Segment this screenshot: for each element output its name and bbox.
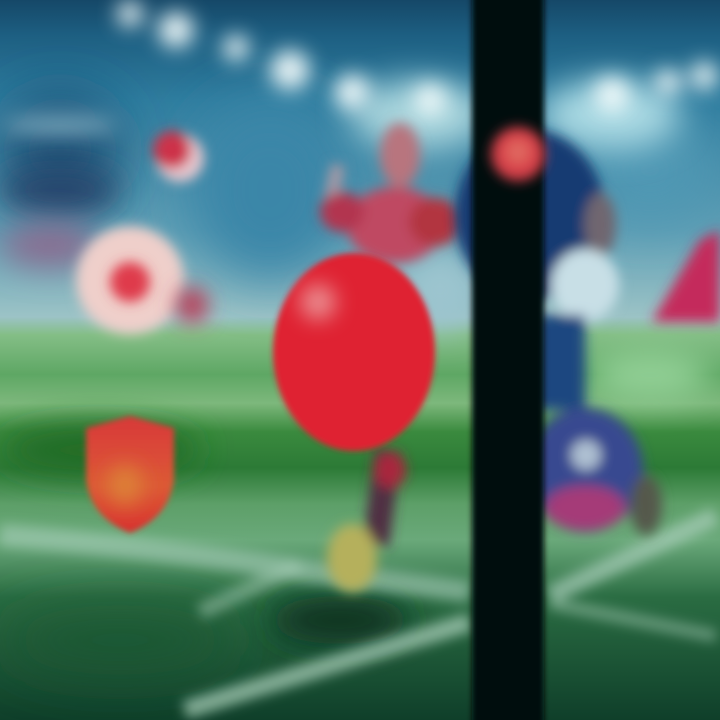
icon: small red circle badge — [153, 131, 204, 182]
pitch shading — [0, 350, 710, 675]
torso — [347, 187, 443, 263]
player in red kit — [320, 123, 461, 592]
stadium background — [0, 80, 715, 330]
right arm — [409, 198, 461, 246]
target icon: large concentric circles — [76, 226, 208, 334]
player in blue kit — [455, 130, 662, 535]
head — [380, 123, 420, 187]
stadium floodlights — [117, 1, 718, 116]
boot — [327, 524, 377, 592]
arm raised — [330, 165, 338, 205]
icon: red circle on bar — [491, 127, 545, 181]
black vertical bar — [472, 0, 544, 720]
crowd banner: red stand right — [652, 230, 720, 322]
icon: red shield crest — [86, 416, 174, 533]
red ball — [273, 253, 435, 451]
legs — [376, 450, 388, 545]
pitch lines — [0, 516, 716, 710]
left arm — [320, 192, 364, 232]
